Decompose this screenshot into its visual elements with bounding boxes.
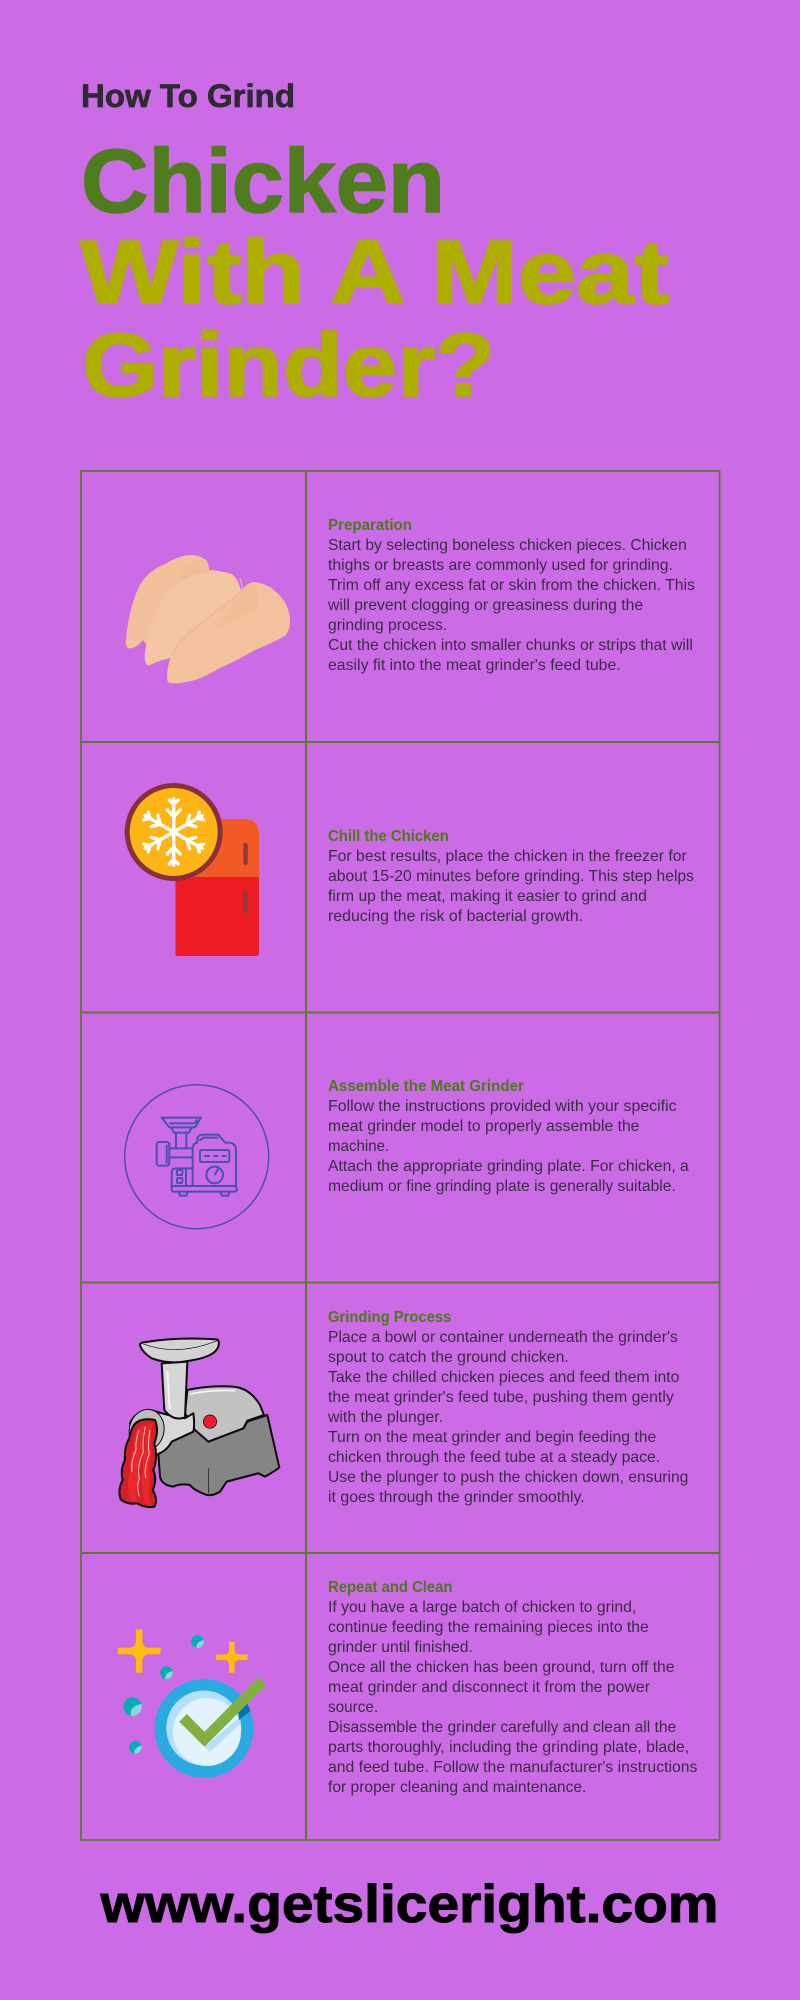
icon: electric meat grinder with ground meat (119, 1338, 279, 1507)
text: preparation: Cut the chicken into smaller chunks or strips that will (328, 637, 693, 654)
text: repeat and clean: for proper cleaning and maintenance. (328, 1779, 586, 1796)
text: chill the chicken: Chill the Chicken (328, 828, 449, 845)
text: grinding process: with the plunger. (327, 1409, 443, 1426)
title line: With A Meat: With A Meat (80, 223, 669, 323)
text: preparation: thighs or breasts are commonly used for grinding. (328, 557, 673, 574)
text: grinding process: Grinding Process (328, 1309, 452, 1326)
text: preparation: easily fit into the meat grinder's feed tube. (328, 657, 621, 674)
panel: preparation (81, 471, 720, 742)
icon: fridge with snowflake badge (127, 786, 259, 956)
text: chill the chicken: about 15-20 minutes before grinding. This step helps (328, 868, 694, 885)
icon: clean plate with check mark and sparkles (118, 1629, 266, 1778)
text: assemble the meat grinder (328, 1078, 689, 1195)
panel: repeat and clean (81, 1553, 720, 1840)
text: grinding process: Use the plunger to push the chicken down, ensuring (328, 1469, 688, 1486)
title block (80, 78, 669, 416)
text: preparation: grinding process. (328, 617, 447, 634)
text: repeat and clean: meat grinder and disconnect it from the power (328, 1679, 650, 1696)
text: assemble the meat grinder: medium or fine grinding plate is generally suitable. (328, 1178, 676, 1195)
icon: meat grinder outline in circle (125, 1085, 269, 1229)
footer: website url: www.getsliceright.com (99, 1875, 718, 1934)
text: chill the chicken: For best results, place the chicken in the freezer for (328, 848, 687, 865)
text: chill the chicken: firm up the meat, making it easier to grind and (328, 888, 647, 905)
text: grinding process: chicken through the feed tube at a steady pace. (328, 1449, 660, 1466)
text: grinding process (327, 1309, 688, 1506)
text: preparation: will prevent clogging or greasiness during the (327, 597, 643, 614)
text: repeat and clean: grinder until finished. (328, 1639, 473, 1656)
kicker: How To Grind: How To Grind (81, 78, 295, 114)
text: chill the chicken (328, 828, 694, 925)
text: grinding process: Place a bowl or container underneath the grinder's (328, 1329, 678, 1346)
panel: grinding process (81, 1282, 720, 1553)
text: assemble the meat grinder: meat grinder model to properly assemble the (328, 1118, 639, 1135)
text: grinding process: spout to catch the ground chicken. (328, 1349, 569, 1366)
text: chill the chicken: reducing the risk of bacterial growth. (328, 908, 583, 925)
text: grinding process: Take the chilled chicken pieces and feed them into (328, 1369, 680, 1386)
text: assemble the meat grinder: machine. (328, 1138, 389, 1155)
text: repeat and clean: and feed tube. Follow the manufacturer's instructions (328, 1759, 698, 1776)
text: grinding process: Turn on the meat grinder and begin feeding the (328, 1429, 656, 1446)
text: grinding process: it goes through the grinder smoothly. (328, 1489, 585, 1506)
text: assemble the meat grinder: Attach the appropriate grinding plate. For chicken, a (328, 1158, 689, 1175)
text: assemble the meat grinder: Follow the instructions provided with your specific (328, 1098, 677, 1115)
text: preparation: Trim off any excess fat or skin from the chicken. This (328, 577, 695, 594)
text: repeat and clean: continue feeding the remaining pieces into the (328, 1619, 649, 1636)
text: repeat and clean (328, 1579, 698, 1796)
title line: Grinder?: Grinder? (82, 316, 495, 416)
icon: chicken breasts (126, 555, 290, 683)
text: preparation (327, 517, 695, 674)
panel: chill the chicken (81, 742, 720, 1012)
text: repeat and clean: Once all the chicken has been ground, turn off the (328, 1659, 674, 1676)
text: repeat and clean: Disassemble the grinder carefully and clean all the (328, 1719, 676, 1736)
title line: Chicken: Chicken (81, 132, 445, 232)
text: assemble the meat grinder: Assemble the Meat Grinder (328, 1078, 524, 1095)
text: repeat and clean: parts thoroughly, including the grinding plate, blade, (328, 1739, 689, 1756)
text: preparation: Start by selecting boneless chicken pieces. Chicken (328, 537, 687, 554)
text: repeat and clean: Repeat and Clean (328, 1579, 452, 1596)
text: grinding process: the meat grinder's feed tube, pushing them gently (328, 1389, 674, 1406)
text: repeat and clean: If you have a large batch of chicken to grind, (328, 1599, 636, 1616)
text: repeat and clean: source. (328, 1699, 378, 1716)
text: preparation: Preparation (328, 517, 412, 534)
panel: assemble the meat grinder (81, 1012, 720, 1282)
